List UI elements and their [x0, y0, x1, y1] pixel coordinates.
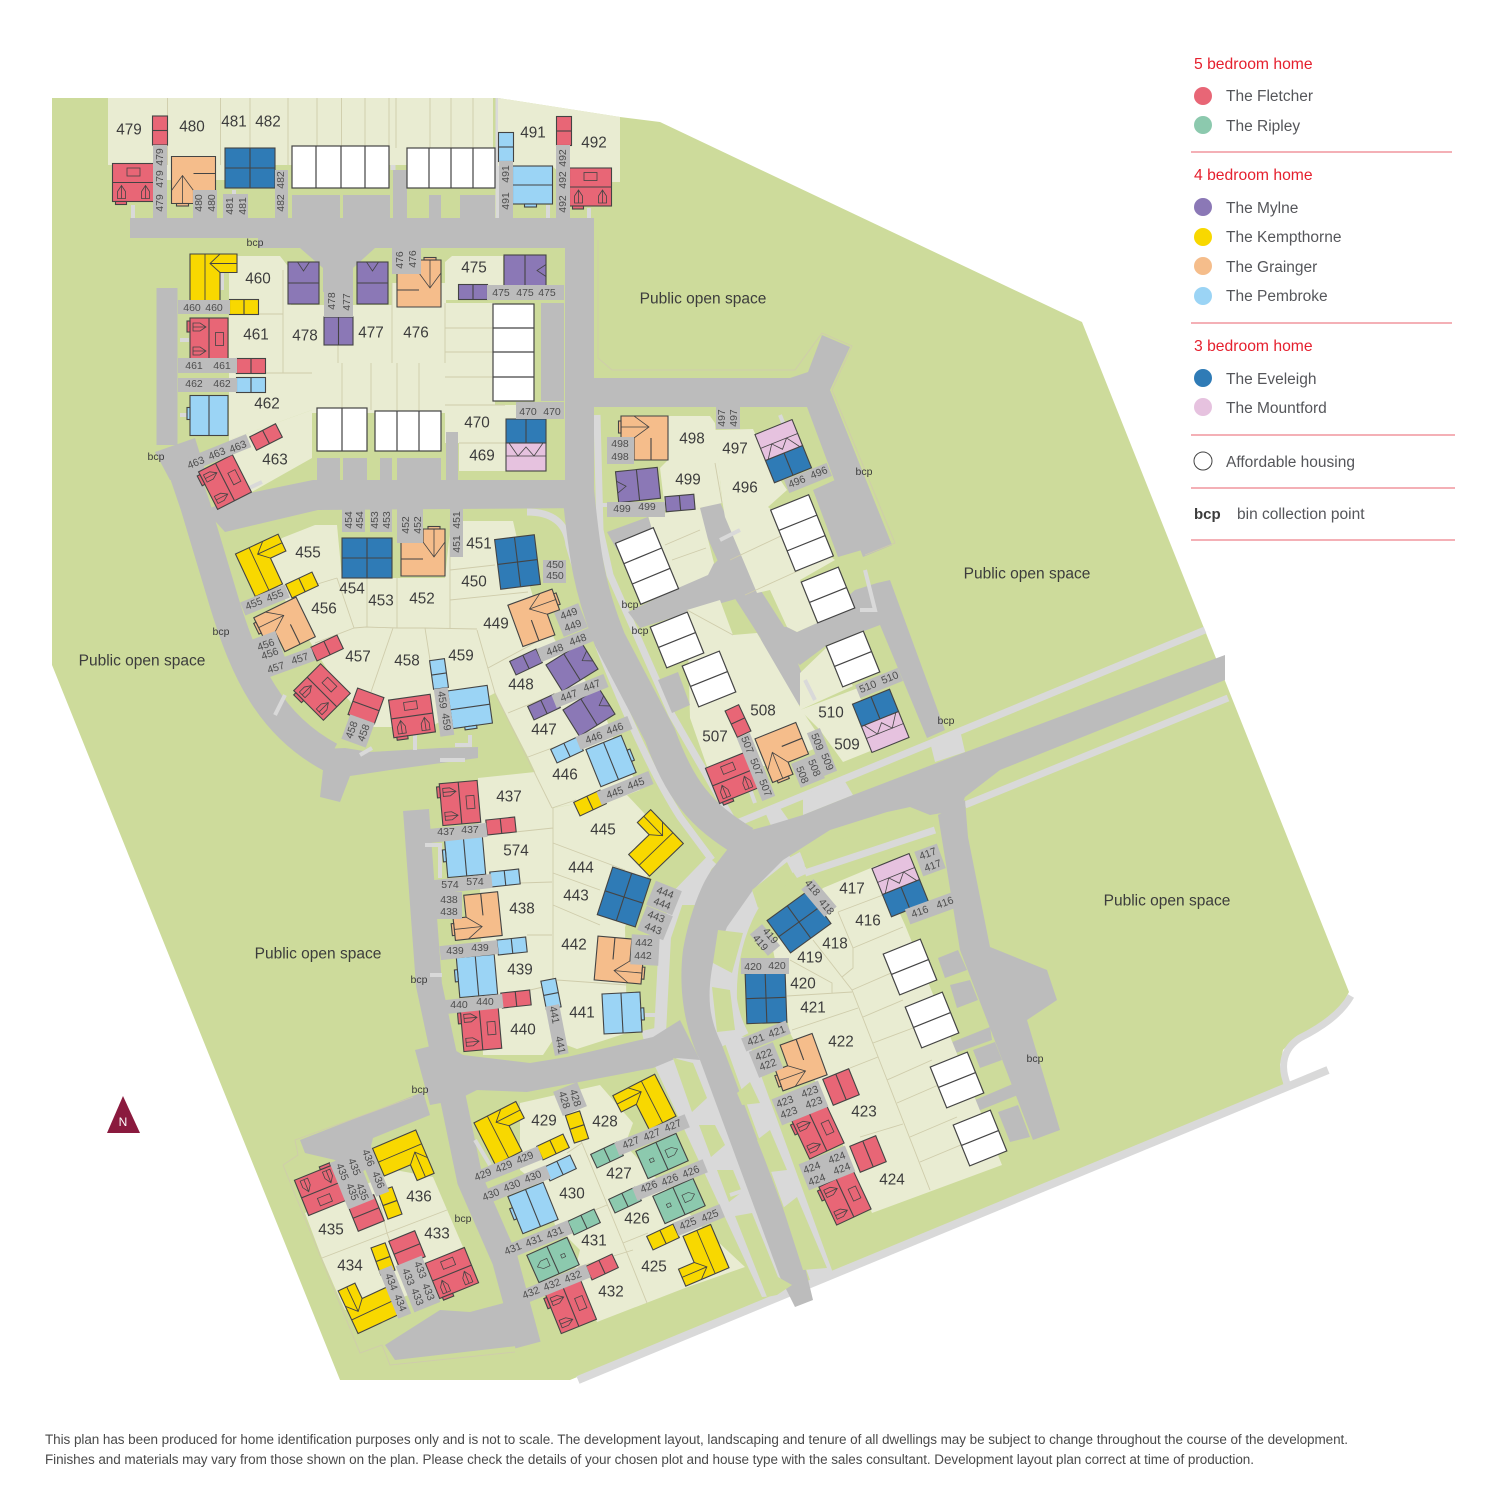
parking bay plot labels: 436	[369, 1170, 387, 1191]
plot numbers: 447	[531, 722, 557, 738]
drives	[133, 190, 875, 1195]
parking bay plot labels: 461	[213, 360, 231, 372]
parking bay plot labels: 458	[355, 723, 373, 743]
parking bay plot labels: 481	[237, 197, 249, 215]
parking bay plot labels: 508	[805, 758, 823, 779]
parking bay plot labels: 444	[655, 884, 675, 902]
parking bay plot labels: 448	[545, 641, 565, 659]
parking bay plot labels: 447	[582, 677, 602, 695]
plot numbers: 482	[255, 114, 281, 130]
parking bay plot labels: 496	[809, 464, 830, 482]
plot numbers: 420	[790, 976, 816, 992]
parking bay plot labels: 459	[435, 690, 449, 710]
legend item: The Eveleigh	[1194, 369, 1316, 388]
legend item: Affordable housing: Affordable housing	[1226, 454, 1355, 471]
plot numbers: 440	[510, 1022, 536, 1038]
parking bay plot labels: 424	[807, 1171, 827, 1189]
parking bay plot labels: 457	[266, 660, 286, 676]
plot numbers: 492	[581, 134, 607, 152]
plot numbers: 459	[448, 648, 474, 664]
parking bay plot labels: 420	[744, 961, 762, 973]
bin collection point labels: bcp	[632, 625, 649, 637]
parking bay plot labels: 491	[500, 165, 512, 183]
plot numbers: 421	[800, 1000, 826, 1016]
public open space labels: Public open space	[1104, 892, 1230, 910]
parking bay plot labels: 438	[440, 894, 458, 906]
parking bay plot labels: 433	[399, 1267, 417, 1288]
parking bay plot labels: 507	[747, 757, 765, 778]
parking bay plot labels: 442	[635, 937, 653, 949]
parking bay plot labels: 435	[353, 1182, 371, 1203]
parking bay plot labels: 450	[546, 559, 564, 571]
parking bay plot labels: 423	[800, 1083, 820, 1101]
public open space labels: Public open space	[255, 946, 381, 962]
legend item: The Eveleigh: The Eveleigh	[1226, 371, 1316, 388]
icon: north arrow: N	[119, 1115, 127, 1129]
parking bay plot labels: 433	[419, 1282, 437, 1303]
plot numbers: 470	[464, 414, 490, 432]
parking bay plot labels: 440	[450, 999, 468, 1011]
parking bay plot labels: 426	[681, 1163, 702, 1181]
parking bay plot labels: 459	[439, 712, 453, 732]
plot numbers: 435	[318, 1222, 344, 1238]
plot numbers: 479	[116, 122, 142, 138]
parking bay plot labels: 433	[408, 1287, 426, 1308]
legend item: The Mylne: The Mylne	[1226, 200, 1298, 217]
legend item: The Fletcher	[1194, 87, 1313, 105]
parking bay plot labels: 463	[186, 454, 207, 472]
parking bay plot labels: 442	[634, 950, 652, 962]
parking bay plot labels: 480	[206, 194, 218, 212]
parking bay plot labels: 436	[359, 1148, 377, 1169]
bin collection point labels: bcp	[412, 1084, 429, 1096]
bin collection point labels: bcp	[856, 466, 873, 478]
parking bay plot labels: 422	[754, 1046, 774, 1064]
parking bay plot labels: 443	[646, 908, 666, 926]
parking bay plot labels: 479	[154, 148, 166, 166]
bin collection point labels: bcp	[148, 451, 165, 463]
parking bay plot labels: 460	[183, 302, 201, 314]
plot numbers: 458	[394, 652, 420, 670]
parking bay plot labels: 430	[502, 1177, 523, 1195]
parking bay plot labels: 423	[779, 1104, 799, 1122]
plot numbers: 429	[531, 1112, 557, 1130]
parking bay plot labels: 435	[333, 1162, 351, 1183]
parking bay plot labels: 424	[802, 1159, 822, 1177]
parking bay plot labels: 574	[466, 876, 484, 888]
plot numbers: 480	[179, 118, 205, 136]
parking bay plot labels: 443	[643, 920, 663, 938]
parking label bays	[153, 145, 959, 1319]
parking bay plot labels: 481	[224, 197, 236, 215]
plot numbers: 424	[879, 1172, 905, 1188]
parking bay plot labels: 496	[787, 473, 808, 491]
parking bay plot labels: 431	[524, 1232, 545, 1250]
parking bay plot labels: 433	[411, 1260, 429, 1281]
disclaimer text: This plan has been produced for home identification purposes only and is not to scale. The development layout, landscaping and tenure of all dwellings may be subject to change throughout the course of the development.	[45, 1432, 1348, 1447]
parking bay plot labels: 428	[556, 1090, 572, 1110]
parking bay plot labels	[154, 148, 955, 1314]
parking bay plot labels: 418	[802, 877, 822, 899]
parking bay plot labels: 509	[808, 732, 826, 753]
panel: site base open space	[52, 98, 1349, 1380]
plot numbers: 434	[337, 1258, 363, 1274]
plot numbers: 476	[403, 324, 429, 342]
plot numbers: 574	[503, 842, 529, 860]
plot numbers: 450	[461, 574, 487, 590]
parking bay plot labels: 492	[557, 171, 569, 189]
plot numbers: 496	[732, 480, 758, 496]
plot numbers: 462	[254, 396, 280, 412]
plot numbers: 448	[508, 676, 534, 694]
parking bay plot labels: 430	[523, 1168, 544, 1186]
plot numbers: 431	[581, 1232, 607, 1250]
bin collection point labels: bcp	[622, 599, 639, 611]
plot numbers: 510	[818, 704, 844, 722]
public open space labels: Public open space	[964, 566, 1090, 582]
plot numbers: 427	[606, 1166, 632, 1182]
parking bay plot labels: 420	[768, 960, 786, 972]
parking bay plot labels: 435	[343, 1182, 361, 1203]
houses: The Ripley	[527, 1133, 705, 1283]
houses: The Kempthorne	[190, 254, 729, 1334]
parking bay plot labels: 431	[545, 1224, 566, 1242]
plot numbers: 499	[675, 472, 701, 488]
plot numbers: 443	[563, 888, 589, 904]
parking bay plot labels: 499	[613, 503, 631, 515]
parking bay plot labels: 470	[519, 406, 537, 418]
plot numbers: 430	[559, 1186, 585, 1202]
plot numbers: 452	[409, 590, 435, 608]
plot numbers: 422	[828, 1034, 854, 1050]
bin collection point labels	[148, 237, 1044, 1225]
green islands in footway	[673, 817, 933, 1297]
parking bay plot labels: 463	[228, 438, 249, 456]
parking bay plot labels: 422	[758, 1056, 778, 1074]
parking bay plot labels: 429	[494, 1158, 515, 1176]
parking bay plot labels: 507	[738, 735, 756, 756]
parking bay plot labels: 416	[935, 894, 955, 912]
parking bay plot labels: 460	[205, 302, 223, 314]
plot numbers: 497	[722, 440, 748, 458]
plot numbers: 433	[424, 1226, 450, 1242]
plot numbers: 441	[569, 1004, 595, 1022]
parking bay plot labels: 429	[473, 1166, 494, 1184]
plot numbers: 507	[702, 728, 728, 746]
parking bay plot labels: 439	[446, 945, 464, 957]
parking bay plot labels: 455	[265, 587, 286, 605]
parking bay plot labels: 434	[382, 1272, 400, 1293]
parking bay plot labels: 451	[451, 511, 463, 529]
legend item: The Grainger	[1194, 257, 1317, 276]
plot numbers: 469	[469, 448, 495, 464]
plot numbers: 460	[245, 270, 271, 288]
parking bay plot labels: 497	[728, 409, 740, 427]
parking bay plot labels: 445	[605, 784, 625, 802]
legend item: The Kempthorne: The Kempthorne	[1226, 229, 1341, 246]
parking bay plot labels: 437	[437, 826, 455, 838]
parking bay plot labels: 427	[663, 1117, 684, 1135]
bin collection point labels: bcp	[247, 237, 264, 249]
plot numbers: 457	[345, 648, 371, 666]
bin collection point labels: bcp	[455, 1213, 472, 1225]
parking bay plot labels: 454	[343, 511, 355, 529]
legend item: The Mountford	[1194, 398, 1327, 417]
legend item: The Ripley: The Ripley	[1226, 118, 1300, 135]
plot numbers: 426	[624, 1210, 650, 1228]
parking bay plot labels: 418	[816, 896, 836, 918]
parking bay plot labels: 444	[652, 895, 672, 913]
legend item: The Grainger: The Grainger	[1226, 259, 1317, 276]
parking bay plot labels: 430	[481, 1186, 502, 1204]
plot numbers: 417	[839, 880, 865, 898]
parking bay plot labels: 421	[746, 1031, 766, 1049]
parking bay plot labels: 479	[154, 170, 166, 188]
parking bay plot labels: 498	[611, 451, 629, 463]
parking bay plot labels: 416	[910, 903, 930, 921]
plot numbers	[116, 114, 905, 1300]
plot numbers: 475	[461, 260, 487, 276]
parking bay plot labels: 446	[584, 729, 604, 747]
public open space labels: Public open space	[640, 290, 766, 308]
parking bay plot labels: 476	[394, 251, 406, 269]
roads	[130, 218, 1225, 1360]
parking bay plot labels: 438	[440, 906, 458, 918]
icon: north arrow	[107, 1096, 140, 1133]
parking bay plot labels: 417	[918, 845, 938, 863]
plot numbers: 416	[855, 912, 881, 930]
plot numbers: 453	[368, 592, 394, 610]
bin collection point labels: bcp	[1027, 1053, 1044, 1065]
plot numbers: 436	[406, 1188, 432, 1206]
parking bay plot labels: 461	[185, 360, 203, 372]
legend item: bcp: bcp	[1194, 506, 1221, 523]
parking bay plot labels: 508	[793, 765, 811, 786]
parking bay plot labels: 456	[256, 636, 276, 654]
parking bay plot labels: 426	[660, 1171, 681, 1189]
parking bay plot labels: 463	[207, 445, 228, 463]
parking bay plot labels: 432	[563, 1268, 584, 1286]
bin collection point labels: bcp	[411, 974, 428, 986]
plot numbers: 451	[466, 536, 492, 552]
parking bay plot labels: 462	[213, 378, 231, 390]
parking bay plot labels: 457	[290, 651, 310, 667]
legend item: The Mountford: The Mountford	[1226, 400, 1327, 417]
parking bay plot labels: 455	[244, 595, 265, 613]
parking bay plot labels: 448	[568, 631, 588, 649]
plot numbers: 491	[520, 124, 546, 142]
legend item: The Mylne	[1194, 198, 1298, 217]
parking bay plot labels: 417	[923, 857, 943, 875]
parking bay plot labels: 477	[341, 293, 353, 311]
legend heading: 3 bedroom home: 3 bedroom home	[1194, 338, 1313, 355]
parking bay plot labels: 447	[559, 687, 579, 705]
parking bay plot labels: 451	[451, 535, 463, 553]
plot numbers: 481	[221, 114, 247, 130]
parking bay plot labels: 497	[716, 409, 728, 427]
plot numbers: 498	[679, 430, 705, 448]
parking bay plot labels: 507	[756, 778, 774, 799]
legend	[1191, 56, 1455, 540]
parking bay plot labels: 423	[804, 1094, 824, 1112]
parking bays	[292, 170, 1030, 1142]
plot numbers: 418	[822, 936, 848, 952]
plot numbers: 445	[590, 822, 616, 838]
parking bay plot labels: 435	[345, 1157, 363, 1178]
parking bay plot labels: 510	[858, 678, 879, 696]
plot numbers: 446	[552, 766, 578, 784]
plot numbers: 509	[834, 736, 860, 754]
plot numbers: 454	[339, 580, 365, 598]
houses: The Pembroke	[187, 132, 645, 1235]
parking bay plot labels: 510	[880, 669, 901, 687]
parking bay plot labels: 426	[639, 1178, 660, 1196]
parking bay plot labels: 470	[543, 406, 561, 418]
plot numbers: 423	[851, 1104, 877, 1120]
legend item: bcp: bin collection point	[1237, 506, 1365, 523]
disclaimer text	[45, 1432, 1348, 1467]
parking bay plot labels: 476	[407, 250, 419, 268]
parking bay plot labels: 492	[557, 149, 569, 167]
legend item: The Ripley	[1194, 116, 1300, 135]
parking bay plot labels: 482	[275, 171, 287, 189]
parking bay plot labels: 419	[750, 932, 770, 954]
parking bay plot labels: 432	[542, 1276, 563, 1294]
parking bay plot labels: 440	[476, 996, 494, 1008]
houses: The Mylne	[288, 255, 695, 736]
parking bay plot labels: 458	[343, 720, 361, 740]
parking bay plot labels: 432	[521, 1284, 542, 1302]
parking bay plot labels: 498	[611, 438, 629, 450]
parking bay plot labels: 419	[760, 925, 780, 947]
parking bay plot labels: 446	[605, 720, 625, 738]
plot boundary lines	[168, 98, 968, 1365]
plots cream	[108, 98, 1002, 1322]
public open space labels: Public open space	[79, 652, 205, 670]
footways	[293, 98, 1351, 1380]
bin collection point labels: bcp	[213, 626, 230, 638]
parking bay plot labels: 475	[492, 287, 510, 299]
plot numbers: 432	[598, 1284, 624, 1300]
parking bay plot labels: 428	[567, 1088, 583, 1108]
parking bay plot labels: 453	[369, 511, 381, 529]
plot numbers: 438	[509, 900, 535, 918]
parking bay plot labels: 453	[381, 511, 393, 529]
parking bay plot labels: 509	[818, 752, 836, 773]
parking bay plot labels: 462	[185, 378, 203, 390]
parking bay plot labels: 424	[832, 1160, 852, 1178]
parking bay plot labels: 475	[538, 287, 556, 299]
parking bay plot labels: 574	[441, 879, 459, 891]
plot numbers: 478	[292, 328, 318, 344]
parking bay plot labels: 429	[515, 1149, 536, 1167]
houses: The Eveleigh and The Mountford	[225, 148, 929, 1024]
parking bay plot labels: 492	[557, 195, 569, 213]
parking bay plot labels: 491	[500, 192, 512, 210]
crossing pads	[653, 730, 965, 1297]
plot numbers: 442	[561, 936, 587, 954]
parking bay plot labels: 425	[678, 1215, 699, 1233]
parking bay plot labels: 449	[563, 617, 583, 635]
plot numbers: 419	[797, 950, 823, 966]
plot numbers: 449	[483, 616, 509, 632]
disclaimer text: Finishes and materials may vary from those shown on the plan. Please check the details of your chosen plot and house type with the sales consultant. Development layout plan correct at time of production.	[45, 1452, 1254, 1467]
plot numbers: 425	[641, 1258, 667, 1276]
plot numbers: 508	[750, 702, 776, 720]
parking bay plot labels: 423	[775, 1093, 795, 1111]
plot numbers: 439	[507, 962, 533, 978]
legend heading: 5 bedroom home: 5 bedroom home	[1194, 56, 1313, 73]
parking bay plot labels: 427	[621, 1134, 642, 1152]
parking bay plot labels: 478	[326, 292, 338, 310]
parking bay plot labels: 431	[503, 1240, 524, 1258]
parking bay plot labels: 452	[412, 516, 424, 534]
parking bay plot labels: 424	[827, 1149, 847, 1167]
plot numbers: 477	[358, 324, 384, 342]
parking bay plot labels: 480	[193, 194, 205, 212]
parking bay plot labels: 454	[354, 511, 366, 529]
parking bay plot labels: 427	[642, 1126, 663, 1144]
parking bay plot labels: 439	[471, 942, 489, 954]
plot numbers: 437	[496, 788, 522, 806]
legend item: The Pembroke: The Pembroke	[1226, 288, 1328, 305]
parking bay plot labels: 441	[552, 1035, 568, 1055]
public open space labels	[79, 290, 1230, 962]
plot numbers: 456	[311, 600, 337, 618]
parking bay plot labels: 475	[516, 287, 534, 299]
houses: The Fletcher	[112, 116, 886, 1335]
parking bay plot labels: 452	[400, 516, 412, 534]
parking bay plot labels: 434	[391, 1293, 409, 1314]
plot numbers: 455	[295, 544, 321, 562]
legend heading: 4 bedroom home: 4 bedroom home	[1194, 167, 1313, 184]
parking bay plot labels: 425	[700, 1207, 721, 1225]
parking bay plot labels: 482	[275, 194, 287, 212]
legend item: The Fletcher: The Fletcher	[1226, 88, 1313, 105]
parking bay plot labels: 499	[638, 501, 656, 513]
plot numbers: 428	[592, 1114, 618, 1130]
parking bay plot labels: 445	[626, 775, 646, 793]
parking bay plot labels: 437	[461, 824, 479, 836]
parking bay plot labels: 421	[767, 1023, 787, 1041]
affordable housing blocks	[292, 146, 1007, 1166]
houses: The Grainger	[172, 156, 827, 1092]
parking bay plot labels: 450	[546, 570, 564, 582]
parking bay plot labels: 441	[546, 1005, 562, 1025]
plot numbers: 463	[262, 452, 288, 468]
parking bay plot labels: 449	[559, 605, 579, 623]
plot numbers: 461	[243, 326, 269, 344]
bin collection point labels: bcp	[938, 715, 955, 727]
plot numbers: 444	[568, 860, 594, 876]
parking bay plot labels: 456	[260, 645, 280, 663]
parking bay plot labels: 479	[154, 194, 166, 212]
